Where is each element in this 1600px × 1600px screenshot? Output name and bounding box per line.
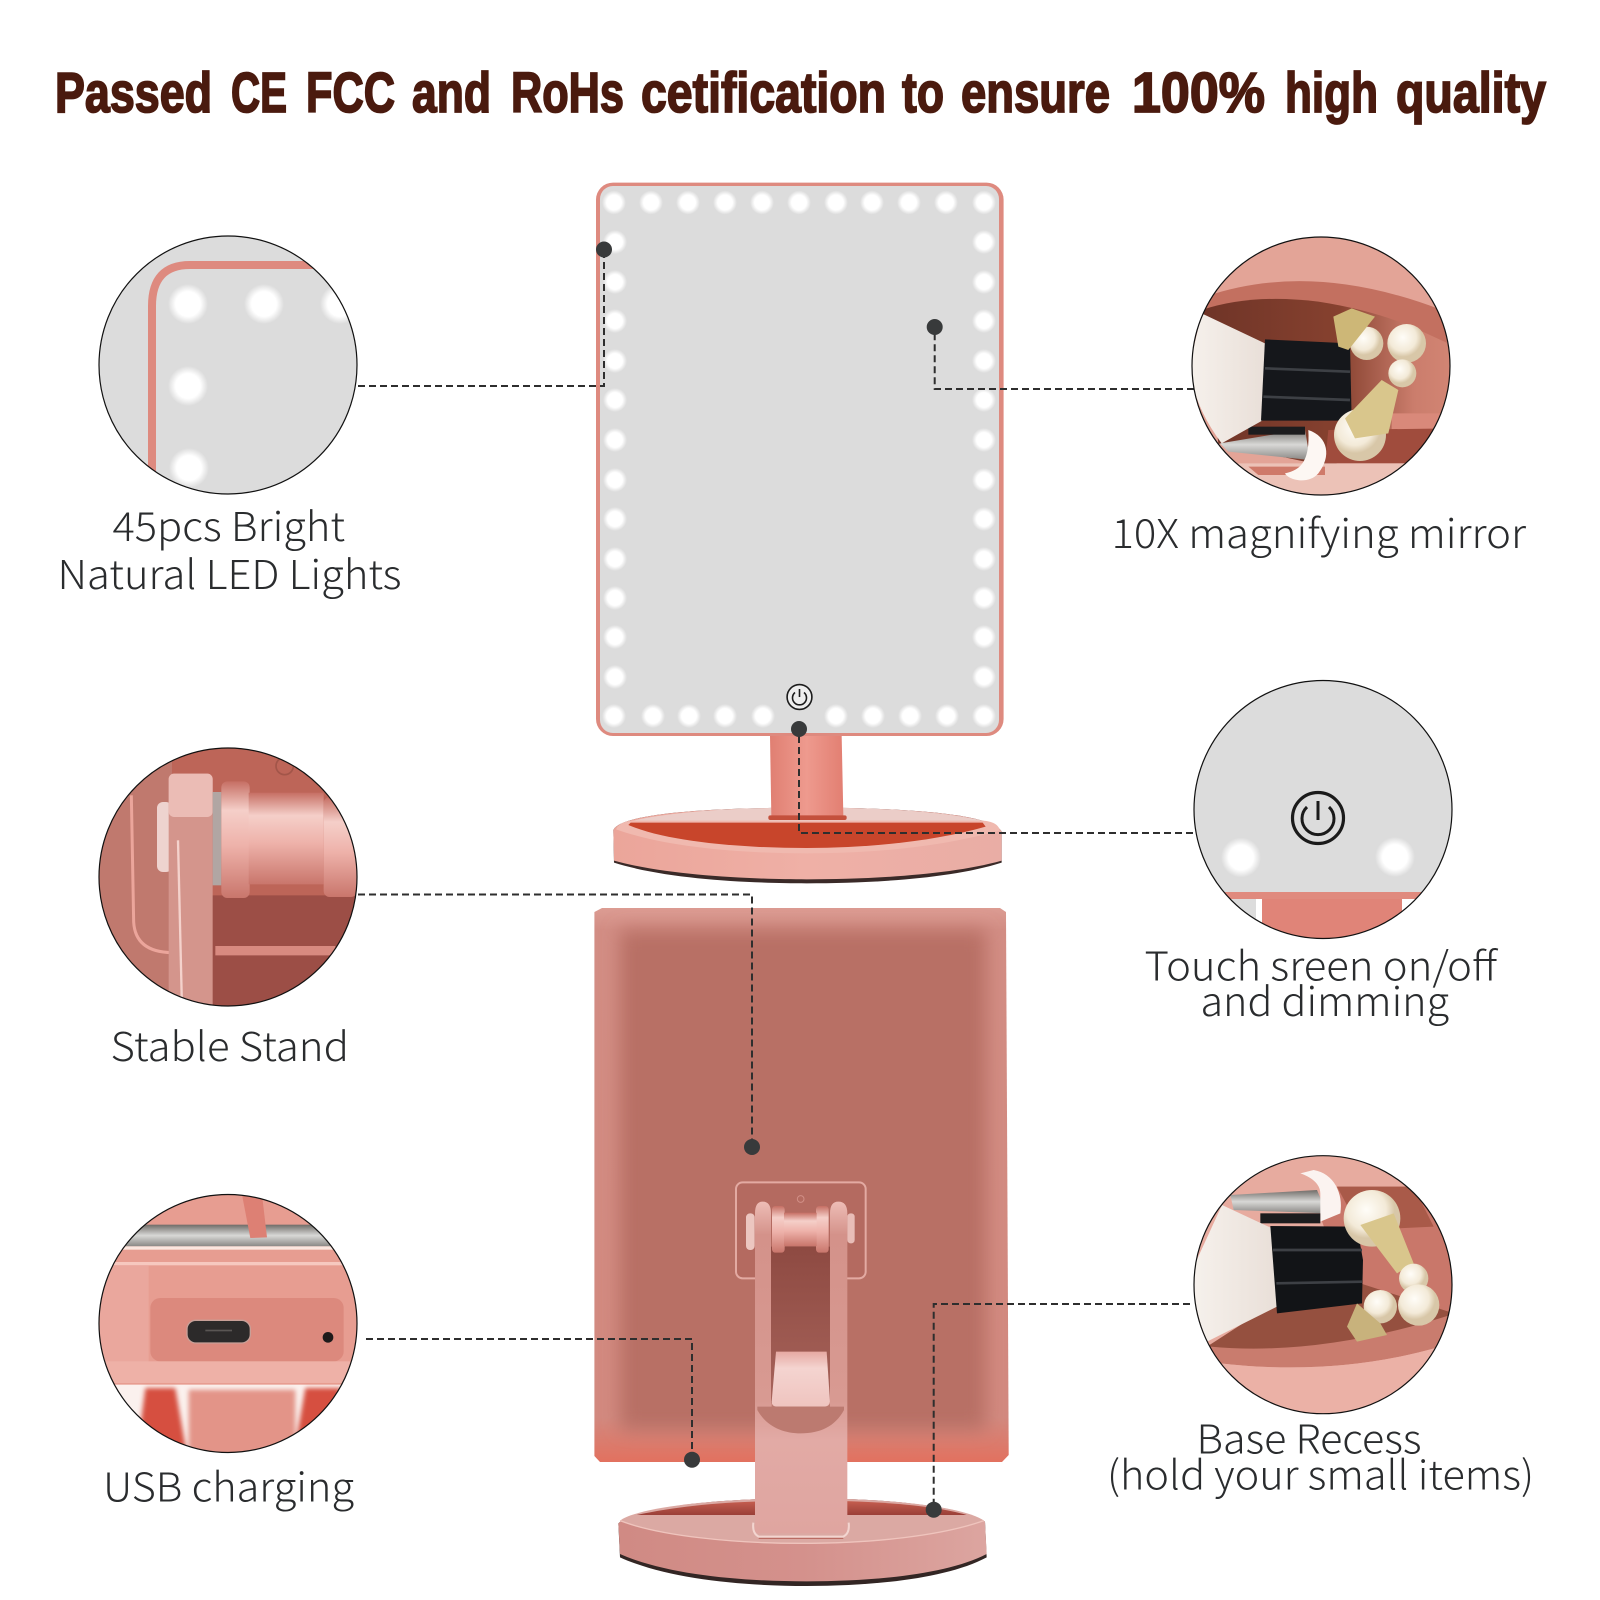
detail image: brush and pearls bbox=[1192, 238, 1450, 494]
panel: touch screen bbox=[1144, 675, 1499, 1028]
line: touch bbox=[799, 730, 1193, 833]
panel: USB charging bbox=[92, 1188, 364, 1514]
mirror back view bbox=[594, 908, 1009, 1586]
title bbox=[55, 61, 1546, 125]
mirror frame bbox=[596, 183, 1004, 736]
title: to bbox=[902, 61, 944, 125]
detail image: hinge bbox=[100, 748, 356, 1006]
dot: magnifying mirror bbox=[927, 319, 943, 335]
front base bbox=[613, 808, 1002, 883]
title: CE bbox=[231, 61, 287, 125]
label: Touch sreen on/off bbox=[1144, 934, 1499, 992]
front neck bbox=[768, 736, 847, 820]
ring bbox=[99, 748, 357, 1006]
LED lights bbox=[602, 190, 996, 728]
icon: power bbox=[1292, 792, 1344, 844]
dot: stable stand bbox=[744, 1139, 760, 1155]
back base bbox=[618, 1498, 987, 1586]
detail image: USB port bbox=[100, 1195, 356, 1452]
callout lines bbox=[358, 242, 1194, 1518]
ring bbox=[1194, 1156, 1452, 1414]
dot: touch bbox=[791, 721, 807, 737]
label line 2: (hold your small items) bbox=[1107, 1444, 1534, 1502]
back panel bbox=[594, 908, 1009, 1462]
title: ensure bbox=[961, 61, 1110, 125]
ring bbox=[99, 236, 357, 494]
label: USB charging bbox=[103, 1456, 354, 1514]
line: USB bbox=[366, 1339, 692, 1460]
dot: LED bbox=[596, 242, 612, 258]
label line 2: Natural LED Lights bbox=[58, 543, 402, 601]
panel: stable stand bbox=[92, 742, 364, 1073]
title: Passed bbox=[55, 61, 212, 125]
title: cetification bbox=[641, 61, 886, 125]
label: Stable Stand bbox=[110, 1015, 349, 1073]
dot: USB bbox=[684, 1452, 700, 1468]
ring bbox=[1194, 680, 1452, 938]
panel: base recess bbox=[1107, 1150, 1534, 1502]
label: 45pcs Bright bbox=[112, 495, 345, 553]
label line 2: and dimming bbox=[1200, 970, 1449, 1028]
back bracket and arm bbox=[736, 1182, 866, 1538]
panel: magnifying mirror bbox=[1112, 230, 1527, 560]
title: FCC bbox=[306, 61, 395, 125]
line: stable stand bbox=[358, 894, 752, 1147]
line: magnifying mirror bbox=[935, 327, 1194, 389]
ring bbox=[1192, 237, 1450, 495]
ring bbox=[99, 1194, 357, 1452]
icon: touch power button bbox=[787, 685, 812, 709]
mirror glass bbox=[600, 186, 999, 733]
title: 100% bbox=[1132, 61, 1265, 125]
mirror front view bbox=[596, 183, 1004, 883]
detail image: mirror corner bbox=[98, 235, 360, 495]
title: quality bbox=[1396, 61, 1546, 125]
dot: base recess bbox=[926, 1502, 942, 1518]
line: LED bbox=[358, 250, 604, 386]
label: 10X magnifying mirror bbox=[1112, 502, 1527, 560]
detail image: power button bbox=[1194, 681, 1452, 938]
label: Base Recess bbox=[1196, 1408, 1422, 1466]
title: and bbox=[412, 61, 491, 125]
title: RoHs bbox=[511, 61, 624, 125]
line: base recess bbox=[934, 1304, 1190, 1510]
detail image: brush in recess bbox=[1194, 1156, 1452, 1414]
panel: LED lights bbox=[58, 235, 402, 601]
title: high bbox=[1285, 61, 1378, 125]
